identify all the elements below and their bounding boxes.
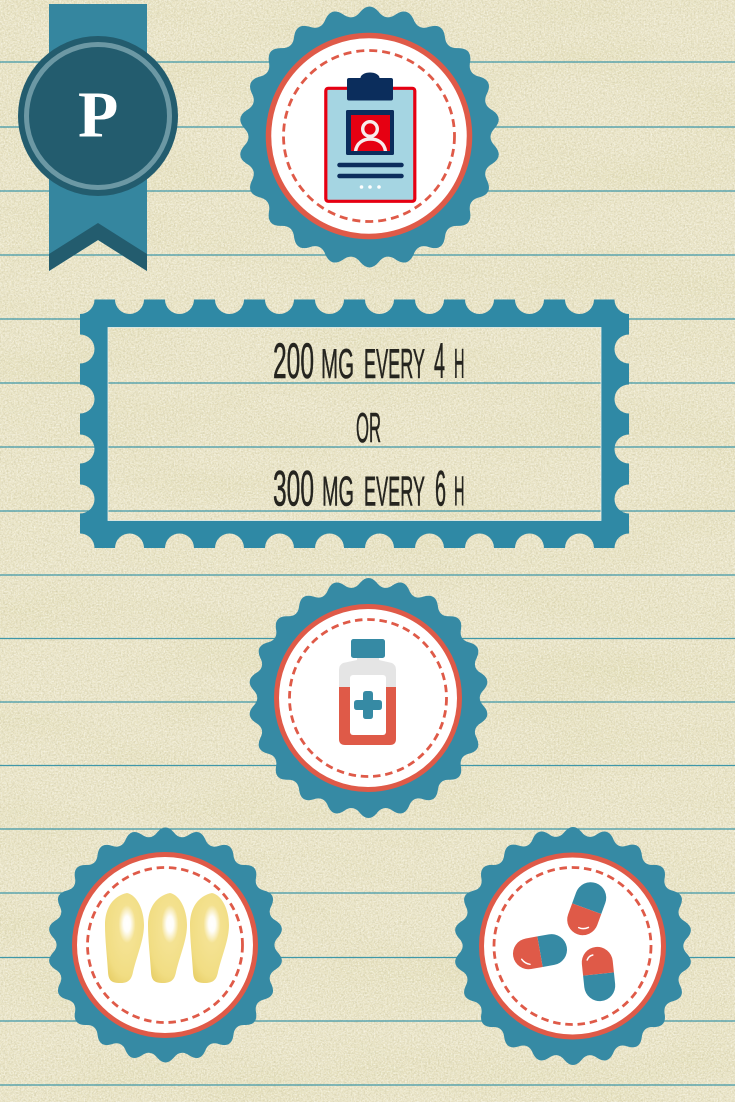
red ring xyxy=(268,36,470,236)
line: 300 mg every 6 h: EVERY xyxy=(364,468,425,514)
red ring xyxy=(482,855,664,1037)
badge: suppositories xyxy=(49,828,282,1062)
dashed ring xyxy=(88,868,242,1022)
icon: capsule right xyxy=(580,945,617,1003)
line: 200 mg every 4 h: 200 xyxy=(273,333,314,389)
icon: clipboard xyxy=(326,73,415,201)
text: H xyxy=(454,340,464,387)
icon: bottle xyxy=(339,639,396,745)
line: 200 mg every 4 h xyxy=(273,333,464,389)
scalloped edge xyxy=(250,578,487,818)
text: H xyxy=(454,468,464,514)
icon: suppository 3 xyxy=(190,893,229,983)
dashed ring xyxy=(494,868,651,1024)
line: 300 mg every 6 h: MG xyxy=(322,468,354,514)
badge: medicine bottle xyxy=(250,578,487,818)
line: 200 mg every 4 h: MG xyxy=(321,340,354,387)
icon: capsule top xyxy=(563,878,611,940)
seal ring xyxy=(26,44,170,188)
line: 200 mg every 4 h: EVERY xyxy=(364,340,425,387)
icon: capsule left xyxy=(511,932,569,972)
dashed ring xyxy=(290,620,446,776)
postage stamp frame xyxy=(80,300,629,548)
line: 300 mg every 6 h: 6 xyxy=(435,460,446,516)
badge: patient clipboard xyxy=(240,6,499,267)
ribbon xyxy=(49,4,147,271)
dosage text xyxy=(273,333,464,516)
icon: suppository 1 xyxy=(105,893,144,983)
line: 200 mg every 4 h: 4 xyxy=(434,333,445,389)
dosage text: OR xyxy=(356,404,381,451)
icon: suppository 2 xyxy=(148,893,187,983)
ribbon fold xyxy=(49,223,147,271)
scalloped edge xyxy=(455,827,691,1065)
seal disc xyxy=(18,36,178,196)
scalloped edge xyxy=(49,828,282,1062)
letter P: P xyxy=(78,78,118,152)
line: 300 mg every 6 h: 300 xyxy=(273,460,314,516)
dashed ring xyxy=(284,50,454,222)
ribbon seal with letter P xyxy=(18,4,178,271)
red ring xyxy=(276,606,460,790)
badge: capsules xyxy=(455,827,691,1065)
scalloped edge xyxy=(240,6,499,267)
line: 300 mg every 6 h xyxy=(273,460,464,516)
red ring xyxy=(74,854,256,1036)
